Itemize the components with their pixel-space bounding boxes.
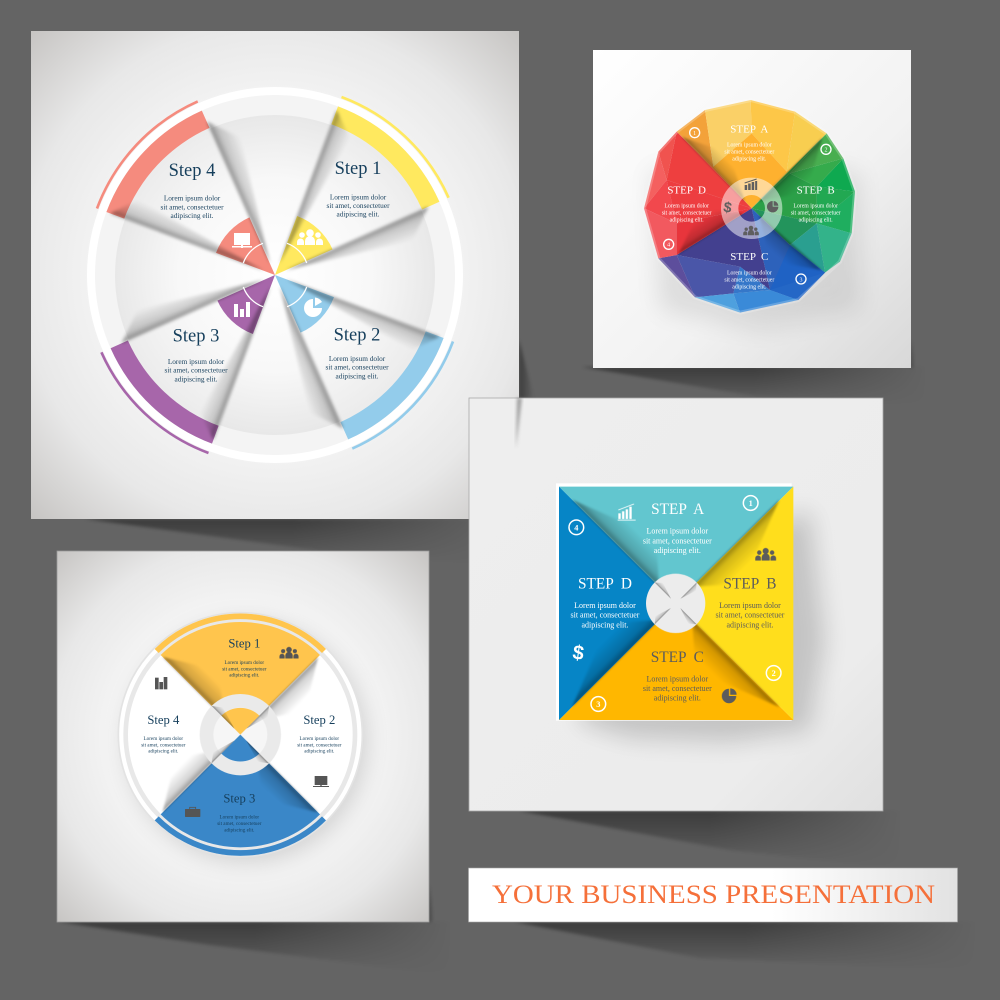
- text: step A: STEP A: [730, 124, 768, 136]
- text: step 4: adipiscing elit.: [148, 749, 178, 755]
- text: step 2: [297, 713, 342, 755]
- square diagram: [555, 483, 796, 724]
- icon: pie chart grey: [722, 688, 737, 703]
- text: step 2: Lorem ipsum dolor: [329, 354, 386, 363]
- text: step C: [643, 649, 712, 703]
- arc: yellow top: [157, 616, 324, 651]
- text: step B: STEP B: [797, 184, 835, 196]
- number badge 1: 1: [693, 131, 696, 137]
- text: step B: [716, 576, 785, 629]
- text: step 1: [222, 637, 267, 679]
- text: step A: sit amet, consectetuer: [724, 150, 774, 156]
- number badge 4: [569, 520, 584, 535]
- text: step B: sit amet, consectetuer: [716, 611, 785, 620]
- centre white arcs: [243, 243, 307, 307]
- number badge 3: [796, 274, 806, 284]
- text: step A: [643, 501, 712, 555]
- text: step 3: sit amet, consectetuer: [217, 821, 262, 827]
- text: step C: STEP C: [651, 649, 704, 666]
- text: step C: sit amet, consectetuer: [643, 684, 712, 693]
- text: step B: STEP B: [723, 576, 777, 593]
- text: step 4: sit amet, consectetuer: [160, 202, 224, 211]
- wedge: step 1 yellow: [161, 622, 320, 735]
- text: step A: [724, 124, 774, 163]
- text: step B: adipiscing elit.: [799, 217, 833, 223]
- text: step 2: Step 2: [334, 326, 380, 346]
- text: step C: [724, 251, 774, 291]
- text: step 1: sit amet, consectetuer: [222, 666, 267, 672]
- icon: people group grey: [755, 548, 776, 561]
- number badge 4: 4: [667, 243, 670, 249]
- icon: dollar: $: [722, 200, 733, 217]
- text: step 1: Step 1: [335, 159, 381, 179]
- number badge 3: [591, 697, 606, 711]
- icon: pie chart: [767, 201, 778, 212]
- text: step C: Lorem ipsum dolor: [727, 271, 772, 277]
- text: step D: adipiscing elit.: [581, 620, 629, 629]
- text: step 3: Lorem ipsum dolor: [220, 815, 259, 821]
- text: step 3: adipiscing elit.: [224, 827, 254, 833]
- polygon diagram: [644, 100, 855, 313]
- text: step 3: Lorem ipsum dolor: [168, 357, 225, 366]
- wheel: outer ring and inner disk: [87, 87, 463, 463]
- panel: yellow blue purple salmon six-part wheel: [31, 31, 519, 519]
- text: step 1: [326, 159, 390, 219]
- title banner: [468, 868, 958, 922]
- text: step 4: Step 4: [147, 713, 180, 727]
- text: step 4: adipiscing elit.: [171, 211, 214, 220]
- icon: bars: [155, 677, 167, 689]
- text: step 2: Step 2: [303, 713, 335, 727]
- triangle: step B yellow: [676, 487, 793, 720]
- text: step D: adipiscing elit.: [670, 217, 704, 223]
- text: step 2: adipiscing elit.: [336, 371, 379, 380]
- number badge 2: [821, 144, 831, 154]
- wedge: step 3 purple: [101, 275, 275, 453]
- arc: blue bottom: [157, 818, 324, 853]
- title text: YOUR BUSINESS PRESENTATION: [492, 879, 935, 909]
- text: step D: sit amet, consectetuer: [571, 611, 640, 620]
- text: step D: Lorem ipsum dolor: [574, 601, 636, 610]
- text: step B: sit amet, consectetuer: [791, 210, 841, 216]
- text: step 2: sit amet, consectetuer: [297, 742, 342, 748]
- text: step B: Lorem ipsum dolor: [719, 601, 781, 610]
- centre translucent ring: [730, 186, 774, 230]
- text: step D: STEP D: [578, 576, 632, 593]
- number badge 2: 2: [772, 669, 776, 678]
- icon: briefcase: [185, 807, 200, 817]
- text: step D: [571, 576, 640, 629]
- wedge: step 3 blue: [161, 735, 320, 847]
- icon: people group: [743, 226, 759, 235]
- number badge 1: [743, 496, 758, 510]
- text: step D: sit amet, consectetuer: [662, 210, 712, 216]
- text: step D: STEP D: [667, 184, 706, 196]
- text: step C: Lorem ipsum dolor: [647, 674, 708, 683]
- number badge 3: 3: [596, 700, 600, 709]
- text: step A: Lorem ipsum dolor: [647, 527, 708, 536]
- text: step 1: adipiscing elit.: [229, 673, 259, 679]
- circle diagram: [118, 613, 362, 857]
- text: step D: Lorem ipsum dolor: [664, 203, 709, 209]
- text: step 4: [141, 713, 186, 755]
- icon: growth chart white: [618, 504, 636, 520]
- icon: growth chart: [745, 179, 757, 190]
- icon: bars: [234, 302, 250, 317]
- panel: faceted polygon diagram: [593, 50, 911, 368]
- decorative page shadows: [60, 340, 975, 975]
- text: step A: adipiscing elit.: [654, 546, 701, 555]
- triangle: step A teal: [559, 487, 793, 603]
- text: step A: sit amet, consectetuer: [643, 536, 712, 545]
- text: step B: adipiscing elit.: [726, 620, 774, 629]
- text: step A: adipiscing elit.: [732, 157, 767, 163]
- number badge 3: 3: [799, 277, 802, 283]
- text: step 3: [217, 791, 262, 833]
- wedge: step 2 blue: [275, 275, 453, 449]
- number badge 2: [766, 666, 781, 680]
- icon: dollar white: $: [571, 642, 585, 665]
- text: step 3: Step 3: [173, 327, 219, 347]
- text: step A: STEP A: [651, 501, 704, 518]
- text: step C: adipiscing elit.: [654, 694, 701, 703]
- icon: pie: [304, 298, 322, 317]
- text: step 3: sit amet, consectetuer: [164, 366, 228, 375]
- facets: step C blue violet: [658, 208, 825, 313]
- icon: people group: [279, 647, 299, 658]
- text: step B: [791, 184, 841, 223]
- text: step 3: adipiscing elit.: [175, 374, 218, 383]
- icon: people: [297, 229, 323, 245]
- text: step 1: Step 1: [228, 637, 260, 651]
- text: step 3: [164, 327, 228, 383]
- text: step B: Lorem ipsum dolor: [793, 203, 838, 209]
- triangle: step D blue: [559, 487, 676, 720]
- text: step 1: sit amet, consectetuer: [326, 201, 390, 210]
- panel: square four-step diagram: [469, 398, 883, 811]
- text: step 4: sit amet, consectetuer: [141, 742, 186, 748]
- text: step 1: Lorem ipsum dolor: [330, 192, 387, 202]
- text: step 4: Lorem ipsum dolor: [144, 736, 183, 742]
- text: step A: Lorem ipsum dolor: [727, 143, 772, 149]
- icon: monitor: [232, 233, 252, 248]
- number badge 4: [664, 239, 674, 249]
- text: step 3: Step 3: [223, 791, 255, 805]
- number badge 4: 4: [574, 523, 579, 532]
- text: step 4: [160, 161, 224, 220]
- triangle: step C amber: [559, 603, 793, 720]
- text: step 2: Lorem ipsum dolor: [300, 736, 339, 742]
- text: step C: STEP C: [730, 251, 768, 263]
- wedge: step 1 yellow: [275, 97, 449, 275]
- number badge 2: 2: [824, 148, 827, 154]
- text: step 1: Lorem ipsum dolor: [225, 660, 264, 666]
- icon: monitor: [313, 776, 329, 787]
- text: step 4: Lorem ipsum dolor: [164, 194, 221, 203]
- number badge 1: [690, 128, 700, 138]
- text: step C: adipiscing elit.: [732, 285, 767, 291]
- text: step D: [662, 184, 712, 223]
- text: step 2: [325, 326, 389, 380]
- text: step 4: Step 4: [169, 161, 215, 181]
- facets: step B green: [752, 133, 855, 273]
- centre circle: [646, 574, 705, 633]
- facets: step D red: [644, 132, 752, 258]
- outer rings: [118, 613, 362, 857]
- text: step 2: sit amet, consectetuer: [325, 363, 389, 372]
- number badge 1: 1: [749, 499, 753, 508]
- text: step C: sit amet, consectetuer: [724, 278, 774, 284]
- text: step 1: adipiscing elit.: [337, 210, 380, 219]
- facets: step A orange yellow: [677, 100, 827, 208]
- wedge: step 4 salmon: [97, 101, 275, 275]
- panel: round four-step diagram: [57, 551, 429, 922]
- centre hub: [200, 694, 281, 775]
- text: step 2: adipiscing elit.: [304, 749, 334, 755]
